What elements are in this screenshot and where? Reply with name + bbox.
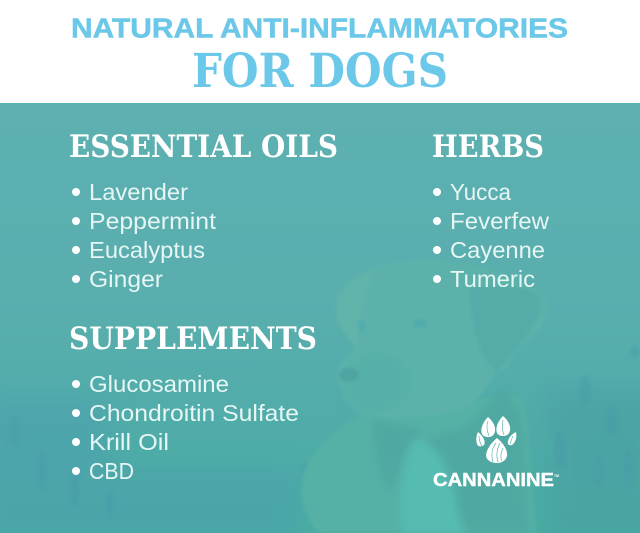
title: FOR DOGS [192,44,448,99]
dog shadow chest [372,385,530,533]
dog nose [339,368,359,382]
lavender field left [0,400,300,533]
dog white chest [401,438,462,533]
dog muzzle [342,353,412,415]
dog photo [301,260,549,533]
dog left ear [338,272,372,345]
list: supplements: Krill Oil [89,429,169,455]
list: herbs [433,179,549,292]
panel: supplements [69,321,317,484]
dog head [335,260,549,418]
list: herbs: Feverfew [450,208,549,234]
wordmark: CANNANINE [433,470,554,490]
heading: essential oils: ESSENTIAL OILS [69,129,338,165]
list: essential oils: Ginger [89,266,163,292]
lavender field right [545,390,640,533]
panel: essential oils [69,129,338,292]
logo: cannanine [433,416,560,490]
list: herbs: Tumeric [450,266,535,292]
dog right ear [470,286,541,372]
list: essential oils: Peppermint [89,208,217,234]
dog body [301,395,536,533]
title: NATURAL ANTI-INFLAMMATORIES [71,12,568,44]
list: essential oils: Lavender [89,179,188,205]
list: essential oils [72,179,217,292]
dog eyes [358,318,427,332]
list: herbs: Cayenne [450,237,545,263]
list: supplements: CBD [89,458,134,484]
list: supplements: Glucosamine [89,371,229,397]
list: herbs: Yucca [450,179,511,205]
list: supplements: Chondroitin Sulfate [89,400,299,426]
icon: paw [476,416,516,463]
heading: herbs: HERBS [432,129,544,165]
panel: herbs [432,129,549,292]
list: supplements [72,371,299,484]
heading: supplements: SUPPLEMENTS [69,321,317,357]
trademark: TM [554,473,560,478]
title [71,12,568,99]
lavender speckles [11,346,640,523]
list: essential oils: Eucalyptus [89,237,205,263]
